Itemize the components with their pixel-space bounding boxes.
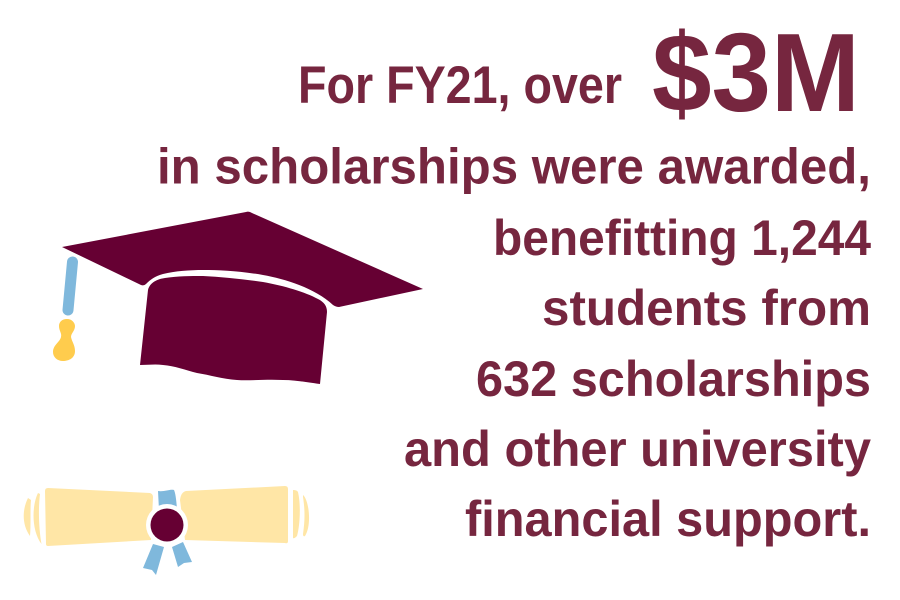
tassel end	[53, 319, 75, 361]
scroll right roll	[180, 486, 288, 543]
tassel cord	[68, 262, 72, 310]
icon: graduation cap	[53, 212, 423, 384]
line: financial support: financial support.	[465, 491, 871, 547]
heading lead-in: For FY21, over	[298, 56, 622, 115]
ribbon right tail	[172, 542, 192, 567]
line: 632 scholarships: 632 scholarships	[476, 351, 871, 407]
seal outline	[146, 504, 188, 546]
scroll edge marks	[24, 490, 309, 544]
scroll left roll	[45, 488, 153, 546]
line: and other university: and other university	[404, 421, 871, 477]
seal	[150, 508, 184, 542]
line: in scholarships were awarded: in scholarships were awarded,	[157, 138, 871, 194]
line: benefitting 1,244: benefitting 1,244	[493, 210, 871, 266]
line: students from: students from	[542, 280, 871, 336]
big number: $3M: $3M	[652, 11, 860, 135]
cap body	[140, 276, 327, 384]
icon: diploma scroll	[24, 486, 309, 575]
text block: scholarship statement	[157, 11, 871, 547]
cap board	[62, 212, 423, 307]
ribbon top	[158, 490, 177, 510]
ribbon left tail	[143, 544, 164, 575]
